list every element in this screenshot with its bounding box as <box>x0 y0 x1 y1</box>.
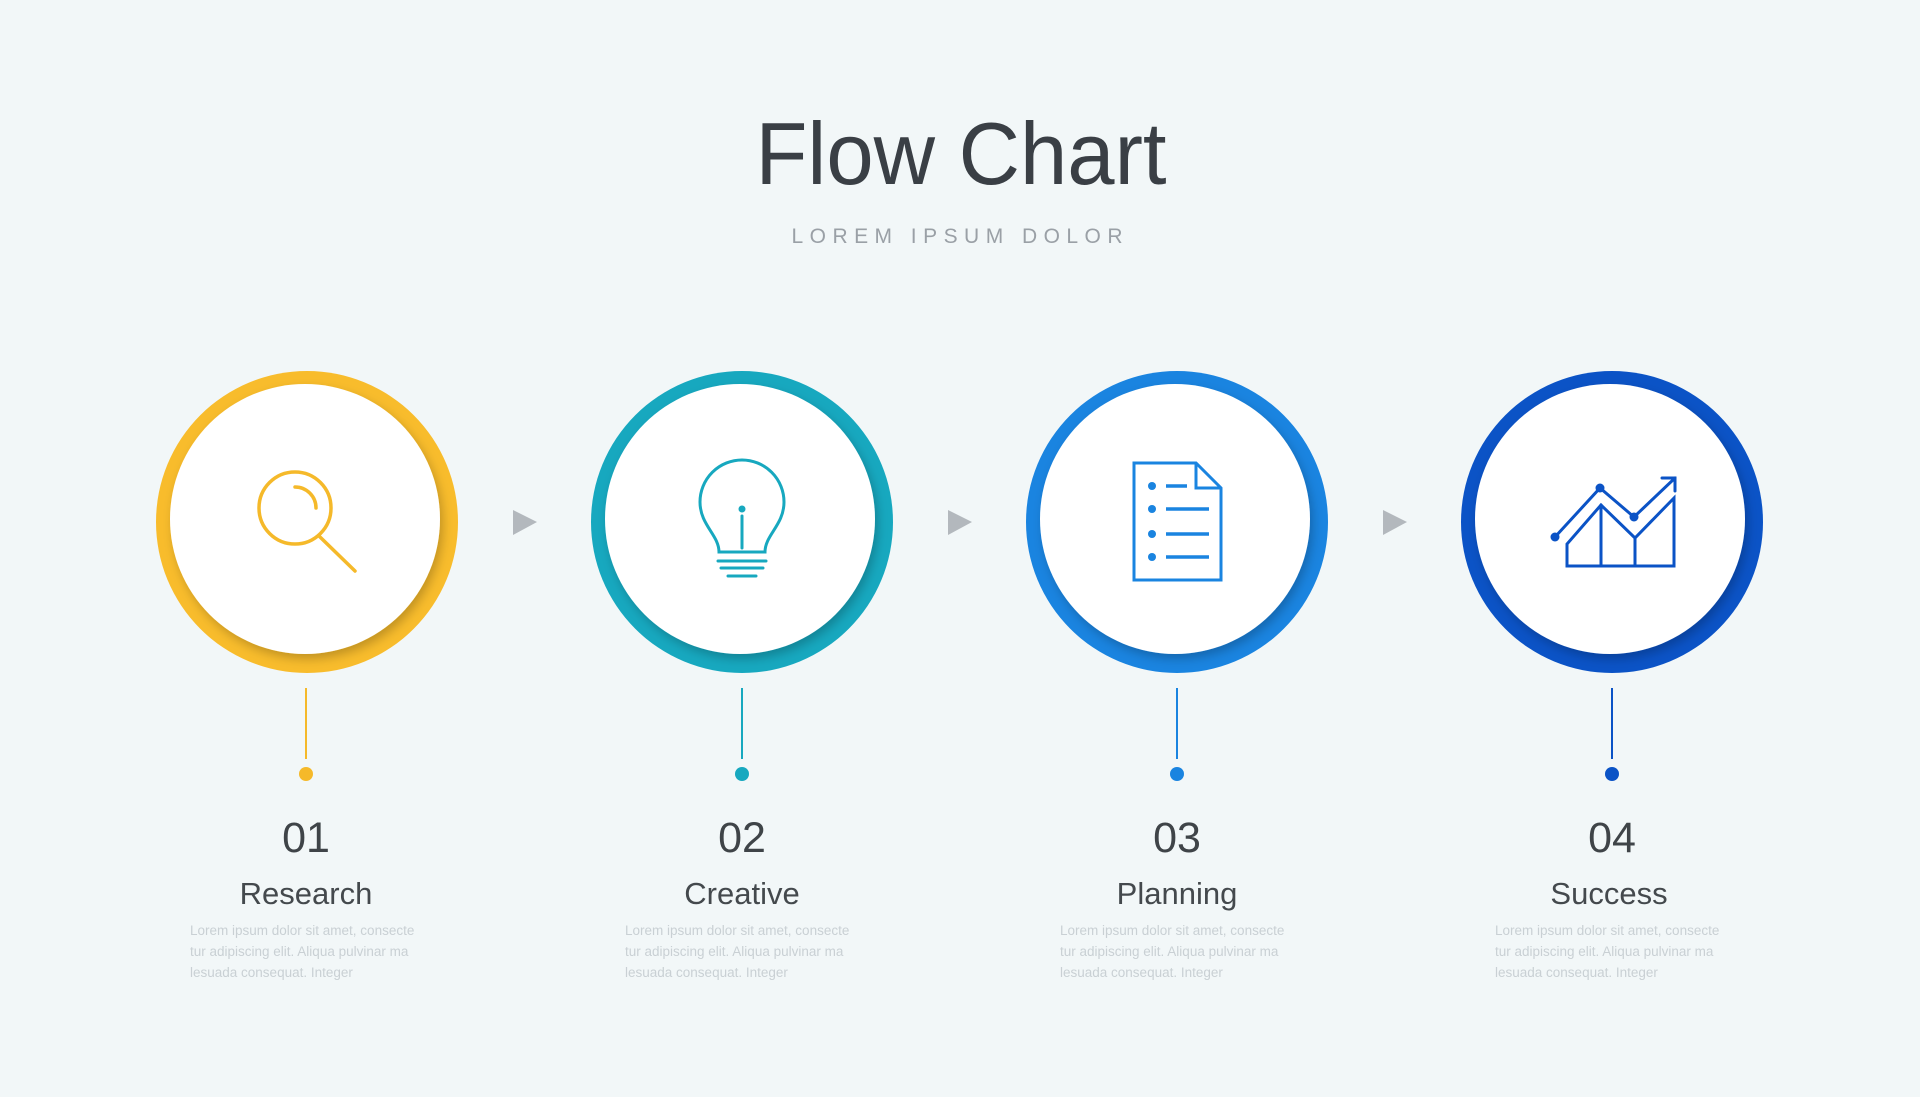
number 03: 03 <box>1153 814 1201 862</box>
body 1: Lorem ipsum dolor sit amet, consecte <box>190 923 414 938</box>
body 1: tur adipiscing elit. Aliqua pulvinar ma <box>190 944 409 959</box>
subtitle: LOREM IPSUM DOLOR <box>792 225 1128 248</box>
body 3: lesuada consequat. Integer <box>1060 965 1223 980</box>
body 3: Lorem ipsum dolor sit amet, consecte <box>1060 923 1284 938</box>
number 01: 01 <box>282 814 330 862</box>
label Research: Research <box>240 876 372 911</box>
ring 4 <box>1461 371 1763 673</box>
label Planning: Planning <box>1117 876 1237 911</box>
body 4: Lorem ipsum dolor sit amet, consecte <box>1495 923 1719 938</box>
body 4: tur adipiscing elit. Aliqua pulvinar ma <box>1495 944 1714 959</box>
label Success: Success <box>1550 876 1668 911</box>
body 4: lesuada consequat. Integer <box>1495 965 1658 980</box>
number 04: 04 <box>1588 814 1636 862</box>
arrow 1 <box>513 510 537 535</box>
body 3: tur adipiscing elit. Aliqua pulvinar ma <box>1060 944 1279 959</box>
title: Flow Chart <box>756 104 1166 203</box>
ring 2 <box>591 371 893 673</box>
connector 2 <box>735 688 749 781</box>
ring 3 <box>1026 371 1328 673</box>
step 1: Research <box>156 371 458 980</box>
connector 3 <box>1170 688 1184 781</box>
body 2: tur adipiscing elit. Aliqua pulvinar ma <box>625 944 844 959</box>
label Creative: Creative <box>684 876 800 911</box>
body 2: lesuada consequat. Integer <box>625 965 788 980</box>
number 02: 02 <box>718 814 766 862</box>
arrow 3 <box>1383 510 1407 535</box>
step 2: Creative <box>591 371 893 980</box>
icon: bulb <box>700 460 784 576</box>
icon: chart <box>1555 478 1675 566</box>
ring 1 <box>156 371 458 673</box>
step 4: Success <box>1461 371 1763 980</box>
arrow 2 <box>948 510 972 535</box>
body 2: Lorem ipsum dolor sit amet, consecte <box>625 923 849 938</box>
body 1: lesuada consequat. Integer <box>190 965 353 980</box>
icon: document <box>1134 463 1221 580</box>
icon: magnifier <box>259 472 355 571</box>
step 3: Planning <box>1026 371 1328 980</box>
connector 4 <box>1605 688 1619 781</box>
connector 1 <box>299 688 313 781</box>
